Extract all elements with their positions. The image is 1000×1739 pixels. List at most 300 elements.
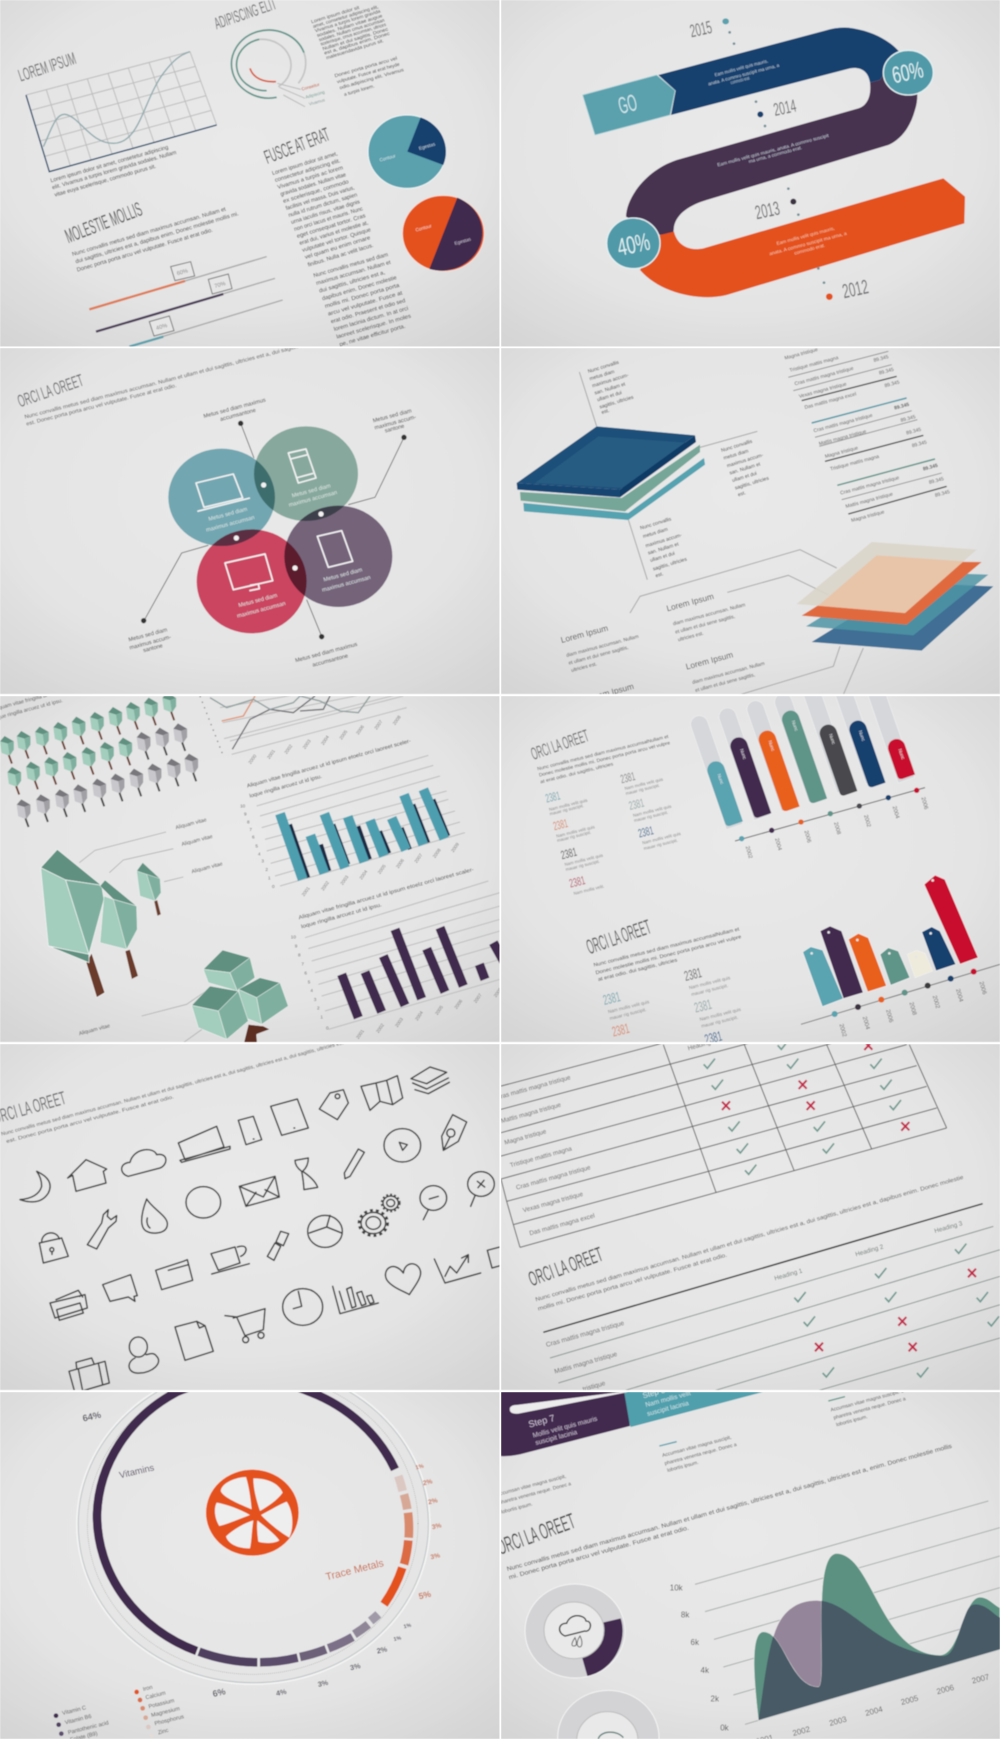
ring: vitamins main segment [97, 1379, 395, 1651]
stats 1: mauar rig suscipit. [643, 838, 678, 851]
caption: chart 2: loque ringilla arcuez ut id ipsu. [301, 902, 383, 930]
table 2 headings: Heading 1 [774, 1267, 804, 1282]
ring: vitamins minor segments [199, 1614, 378, 1662]
circle captions: maximus accumsan [236, 601, 286, 620]
icon: laptop [178, 1126, 230, 1162]
icon: pencil [344, 1149, 364, 1179]
circle captions: Metus sed diam [208, 507, 248, 523]
years: teal chart: 2007 [413, 852, 424, 864]
years: teal chart: 2004 [358, 869, 369, 881]
years: teal chart: 2005 [377, 863, 387, 875]
progress labels [156, 268, 226, 332]
percent labels: metals: 1% [415, 1464, 424, 1471]
stats 1: 2381 [544, 788, 562, 806]
icon: cup [211, 1246, 249, 1274]
stats 1: Nam mollis velit. [573, 883, 605, 896]
progress labels: 70% [214, 281, 226, 290]
go arrow: GO [616, 89, 640, 119]
panel: line icons [0, 1039, 500, 1390]
stats 2: 2381 [601, 988, 622, 1008]
stack note: right: sagittis, ultricies [734, 475, 770, 492]
table 1 row labels: Das mattis magna excel [529, 1212, 596, 1237]
timeline 1 years: 2004 [773, 838, 782, 851]
price tables: Magna tristique [824, 445, 859, 460]
timeline band: navy [658, 28, 898, 115]
price tables: Tristique mattis magna [830, 454, 880, 473]
pie chart: teal and navy: Contour [379, 153, 397, 163]
caption: chart 1: loque ringilla arcuez ut id ipsu. [249, 774, 323, 800]
text column top right: amet, consetetur adipiscing elit, [312, 4, 379, 29]
stats 1: mauar rig suscipit. [556, 830, 592, 843]
label: lorem ipsum 2: et ullam et dui sene sagittis, [675, 614, 736, 636]
stack note: bottom: san. Nullam et [647, 541, 680, 557]
area series: green [754, 1553, 1000, 1720]
icon: tag [319, 1090, 348, 1120]
text column top right: Nullam et dui sagittis. Donec [322, 26, 389, 51]
circle captions: Metus sed diam [291, 483, 332, 499]
line chart years: 2004 [320, 734, 330, 746]
y axis labels: 6k [691, 1638, 700, 1647]
tree labels: Aliquam vitae [181, 834, 213, 848]
timeline 2 years: 2002 [837, 1023, 847, 1038]
stats 2: Nam mollis velit quis [688, 975, 731, 990]
pill bars: fills [705, 708, 915, 827]
icon: zoom out [420, 1186, 447, 1220]
paragraph 1 [537, 734, 671, 784]
stats 1: Nam mollis velit quis [548, 798, 588, 812]
timeline 1 years: 2006 [802, 830, 812, 844]
intro paragraph: Nunc convallis metus sed diam maximus accumsan. Nullam et ullam et dui sagittis, ultricies est a, dui sagittis [24, 344, 300, 421]
tree labels: Aliquam vitae [175, 817, 207, 831]
note 1: Accumsan vitae magna suscipit, [662, 1435, 732, 1459]
axis numbers: purple chart: 2 [317, 1005, 320, 1010]
caption: chart 1: Aliquam vitae fringilla arcuez ut id ipsum etoelz orci laoreet sceler- [246, 738, 412, 790]
icon: phone [288, 449, 316, 483]
timeline band: orange [640, 178, 965, 297]
chart caption: vitae euya scelerisque, commodo purus sit. [54, 164, 157, 199]
small tree [137, 863, 161, 916]
percent labels: 3% [317, 1678, 330, 1689]
x axis labels: 2004 [864, 1704, 884, 1718]
years: teal chart [301, 842, 460, 897]
outer labels: accumsantone [220, 408, 257, 423]
label: lorem ipsum 3 [685, 649, 765, 694]
circle captions: maximus accumsan [288, 490, 338, 509]
stats 1: mauar rig suscipit. [625, 783, 660, 796]
table 1 row labels: Vexas magna tristique [522, 1191, 584, 1214]
progress labels: 40% [156, 323, 168, 332]
caption: chart 2 [298, 867, 475, 930]
stack note: right [720, 439, 770, 498]
stack note: top: maximus accum- [591, 372, 630, 389]
timeline 1 years: 2008 [832, 822, 841, 835]
ring labels: Conseitur [301, 82, 321, 92]
step band: purple: Mollis velit quis mauris [532, 1415, 599, 1440]
outer rings [77, 1364, 430, 1684]
price tables: Cras mattis magna tristique [813, 413, 874, 434]
icon: document [175, 1321, 213, 1360]
text column: fusce at erat: lorem lacinia dictum. In at orci [333, 306, 409, 333]
big tree 2 [100, 880, 138, 979]
pill bar labels [716, 720, 906, 786]
donut chart 1 [525, 1584, 625, 1678]
heading: ORCI LA OREET [493, 1508, 578, 1560]
table 1 row labels: Heading [687, 1039, 712, 1052]
outer labels: santone [384, 424, 405, 435]
panel: pill bars and tag bars: ORCI LA OREET [528, 725, 592, 764]
text column top right: sodales. Nullam vitae augue [316, 13, 383, 38]
line chart [200, 676, 407, 756]
text column top right: a turpis lorem. [343, 83, 375, 97]
text column: fusce at erat: Nunc convallis metus sed diam [313, 252, 389, 279]
text column: fusce at erat: arcu vel vulputate. Fusce at [327, 290, 404, 318]
text column: fusce at erat: Vivamus a turpis ac lorem [277, 165, 344, 191]
years: purple chart: 2002 [375, 1022, 385, 1034]
step band: purple: suscipit lacinia [535, 1429, 578, 1447]
stats 1: Nam mollis velit quis [642, 831, 681, 845]
outer labels: santone [143, 643, 164, 654]
icon: hourglass [295, 1158, 318, 1190]
percent labels: 2% [376, 1644, 389, 1656]
text column: fusce at erat: pe, ne vitae efficitur porta. [339, 324, 407, 348]
donut chart 2 [558, 1690, 659, 1739]
paragraph 2: at erat odio. dui sagittis, ultricies [597, 957, 679, 983]
text column: fusce at erat: vulputate vel tortor. Quisque [301, 227, 372, 254]
icon: house [68, 1160, 107, 1191]
tree labels [78, 817, 223, 1037]
stats 2 [601, 964, 742, 1047]
y axis labels [670, 1583, 730, 1732]
stack note: right: Nunc convallis [720, 439, 754, 454]
paragraph 1: Donec molestie mollis mi. Donec porta porta arcu vel vulpre [538, 740, 671, 778]
paragraph 1: Nunc convallis metus sed diam maximus accumsalNullam et [537, 734, 670, 771]
years: purple chart: 2003 [394, 1017, 404, 1028]
price tables [784, 347, 951, 524]
percent labels: 64% [82, 1410, 103, 1424]
years: purple chart: 2006 [453, 998, 464, 1010]
heading: lorem ipsum: LOREM IPSUM [16, 48, 78, 85]
pill bar labels: Nunc [739, 748, 748, 761]
years: teal chart: 2008 [432, 847, 442, 859]
stats 1: 2381 [568, 873, 587, 891]
percent labels: metals [415, 1464, 442, 1601]
text column top right: vulputate. Fusce at erat heyde [336, 61, 400, 84]
tree labels: Aliquam vitae [191, 861, 223, 875]
timeline 2 years: 2002 [931, 995, 940, 1010]
outer labels: Metus sed diam [128, 627, 168, 643]
axis numbers: purple chart: 6 [304, 970, 307, 975]
note 3: pharetra venenta neque. Donec a [498, 1481, 572, 1506]
timeline 1 years [744, 797, 929, 859]
label: lorem ipsum 4: Lorem Ipsum [585, 681, 635, 703]
icon: rain cloud [560, 1616, 590, 1647]
axis numbers: teal chart [240, 803, 275, 889]
years: purple chart: 2004 [414, 1010, 424, 1022]
price tables: 89.345 [873, 354, 890, 364]
label: lorem ipsum 3: Lorem Ipsum [685, 649, 734, 672]
label: lorem ipsum 1: ultricies est. [571, 661, 598, 674]
icon: trend chart [434, 1255, 481, 1283]
pie chart: teal and navy: Egestas [418, 141, 436, 151]
stats 1: Nam mollis velit quis [556, 824, 595, 839]
chart caption: elit. Vivamus a turpis lorem gravida sodales. Nullam [52, 150, 177, 191]
percent labels [82, 1410, 412, 1699]
axis numbers: purple chart: 9 [295, 944, 298, 949]
badge: 60% [883, 50, 933, 95]
circle captions: maximus accumsan [205, 515, 255, 534]
table 2 headings [774, 1220, 964, 1282]
bar chart: purple [342, 928, 510, 1018]
legend: vitamins: Vitamin B6 [64, 1714, 92, 1726]
legend: metals [134, 1685, 185, 1738]
outer labels: Metus sed diam maximus [203, 397, 267, 420]
axis numbers: teal chart: 10 [240, 803, 246, 808]
line chart years: 2001 [266, 748, 276, 760]
text column: fusce at erat: laoreet scelerisque. In moles [336, 313, 412, 341]
stats 1: Nam mollis velit quis [624, 777, 664, 791]
axis numbers: teal chart: 7 [249, 827, 252, 832]
tag holes [810, 879, 934, 958]
icon: chain [267, 1231, 289, 1260]
paragraph: molestie mollis: Nunc convallis metus sed diam maximus accumsan. Nullam et [72, 207, 227, 258]
stack note: top: metus diam [589, 369, 615, 382]
cube tree [192, 950, 288, 1044]
price tables: Das mattis magna excel [804, 391, 857, 411]
pill bar labels: Nunc [791, 720, 799, 732]
pie chart: orange and purple [402, 195, 484, 271]
axis numbers: purple chart: 7 [301, 961, 304, 966]
panel: charts and text: FUSCE AT ERAT [262, 125, 333, 169]
text column: fusce at erat: non orci lacus et mauris. Nunc [293, 206, 364, 233]
icon: partial box [487, 1247, 500, 1268]
legend: metals: Potassium [148, 1698, 175, 1710]
price tables: Vexas magna tristique [798, 381, 848, 400]
step band: purple [500, 1391, 630, 1456]
legend: metals: Zinc [157, 1728, 169, 1736]
percent labels: metals: 3% [430, 1552, 441, 1561]
percent labels: 4% [275, 1687, 288, 1698]
stats 2: 2381 [703, 1027, 724, 1047]
stack note: right: san. Nullam et [729, 461, 762, 477]
icon: bar chart [333, 1286, 378, 1314]
timeline 1 years: 2002 [862, 814, 871, 828]
stack note: top: san. Nullam et [594, 381, 627, 397]
stats 2: mauar rig suscipit. [701, 1015, 739, 1029]
paragraph 2 [593, 926, 742, 983]
paragraph 2: Donec molestie mollis mi. Donec porta porta arcu vel vulpre [595, 934, 742, 976]
stats 1: 2381 [627, 796, 646, 813]
table 2 row labels: tristique [582, 1380, 607, 1393]
price tables: Mattis magna tristique [845, 491, 894, 510]
pill bar labels: Nunc [828, 733, 837, 746]
icon: folder [156, 1260, 193, 1290]
layer stack: translucent [797, 542, 993, 651]
text column top right: scelerisque, cmus accumsan, ultrices [320, 22, 387, 47]
panel: S-shaped timeline [501, 0, 1000, 346]
note 1: lobortis ipsum. [667, 1460, 699, 1474]
percent labels: metals: 3% [431, 1522, 442, 1531]
stats 1: 2381 [559, 845, 578, 862]
label: lorem ipsum 1: diam maximus accumsan. Nullam [566, 634, 639, 659]
x axis labels: 2006 [936, 1683, 956, 1696]
legend: vitamins: Pantothenic acid [67, 1720, 109, 1736]
axis numbers: purple chart [291, 935, 329, 1030]
stack note: top: est. [601, 408, 610, 416]
timeline 2 years: 2006 [977, 981, 987, 996]
text column top right: malesuendavida purus sit. [325, 38, 384, 60]
line chart years: 2002 [283, 743, 294, 755]
intro paragraph: est. Donec porta porta arcu vel vulputate. Fusce at erat odio. [26, 383, 177, 428]
stats 1: mauar rig suscipit. [633, 810, 669, 823]
paragraph 1: at erat odio. dui sagittis, ultricies [540, 761, 614, 784]
axis numbers: teal chart: 4 [258, 851, 261, 856]
price tables: Cras mattis magna tristique [840, 475, 900, 497]
note 3: Accumsan vitae magna suscipit, [496, 1474, 567, 1498]
table 1 row labels: Magna tristique [504, 1128, 548, 1147]
label: lorem ipsum 2: diam maximus accumsan. Nullam [672, 602, 746, 627]
ring: trace metals segments [384, 1476, 409, 1604]
go arrow [583, 75, 675, 135]
area series: mauve [758, 1600, 1000, 1720]
label: lorem ipsum 3: et ullam et dui sene sagittis, [695, 672, 756, 694]
years: teal chart: 2001 [301, 886, 311, 897]
icon: layers [411, 1067, 449, 1094]
panel: trees and bar charts [0, 682, 503, 1042]
icon: tablet [271, 1099, 308, 1135]
timeline 1 years: 2006 [919, 797, 929, 810]
years: teal chart: 2006 [395, 858, 405, 869]
panel: pill bars and tag bars: ORCI LA OREET [583, 916, 654, 959]
bar chart: teal and navy [280, 789, 448, 879]
x axis labels: 2003 [828, 1714, 848, 1728]
stats 2: mauar rig suscipit. [691, 983, 729, 997]
text column: fusce at erat: finibus. Nulla ac velit lacus. [307, 243, 375, 269]
bar chart grid: teal [257, 755, 465, 886]
circle captions: Metus sed diam [238, 593, 278, 609]
year: 2015: 2015 [688, 17, 714, 41]
panel: pill bars and tag bars [501, 696, 1000, 1047]
price tables: 89.345 [894, 402, 910, 412]
step band: teal [620, 1385, 767, 1427]
label: lorem ipsum 2: Lorem Ipsum [665, 591, 715, 613]
big tree 1 [41, 849, 105, 998]
x axis labels: 2005 [900, 1693, 920, 1707]
ring labels: Vivamus [308, 97, 325, 107]
area overlap [758, 1600, 1000, 1720]
line chart years: 2006 [355, 724, 365, 736]
text column top right: Lorem ipsum dolor sit [310, 5, 361, 24]
years: purple chart: 2007 [473, 992, 483, 1004]
text column top right: Vivamus a turpis lorem gravida [314, 8, 381, 33]
badge: 40%: 40% [615, 229, 653, 262]
line chart [26, 52, 217, 172]
icon: pen nib [442, 1115, 467, 1150]
layer stack: dark [517, 426, 705, 520]
stats 1 [544, 769, 681, 896]
badge: 40% [607, 218, 660, 269]
label: lorem ipsum 2: ultricies est. [677, 631, 704, 643]
stats 2: Nam mollis velit quis [607, 999, 650, 1014]
price tables: Mattis magna tristique [818, 429, 867, 447]
price tables: 89.345 [900, 414, 917, 424]
progress labels: 60% [176, 268, 189, 277]
tag bars [803, 875, 978, 1007]
stack note: right: maximus accum- [726, 452, 764, 469]
paragraph: mollis mi. Donec porta porta arcu vel vulputate. Fusce at erat odio. [537, 1252, 728, 1313]
paragraph: molestie mollis: dui sagittis, ultricies est a, dapibus enim. Donec molestie mollis mi. [75, 211, 240, 265]
outer labels [128, 397, 417, 669]
axis numbers: purple chart: 5 [308, 979, 311, 984]
icon: tablet [317, 531, 353, 567]
stats 2: 2381 [683, 964, 703, 984]
years: purple chart: 2001 [355, 1028, 365, 1040]
icon: play [384, 1129, 421, 1162]
timeline 2 years [837, 981, 987, 1038]
text column top right [310, 4, 405, 97]
circle captions: Metus sed diam [323, 567, 363, 583]
percent labels: 1% [403, 1623, 412, 1630]
axis numbers: teal chart: 9 [244, 811, 247, 816]
text column top right: sodales. Nullam cmus accumsan [318, 17, 385, 42]
pictogram tree grid [0, 693, 198, 827]
percent labels: metals: 2% [422, 1478, 433, 1487]
text column: fusce at erat: gravida sodales. Nullam vitae [280, 172, 347, 198]
outer labels: maximus accum- [129, 635, 172, 651]
text column: fusce at erat: vel quam eu enim ornare [304, 235, 371, 261]
stack note: top: ullam et dui [596, 390, 623, 403]
step band: teal: suscipit lacinia [646, 1400, 690, 1418]
timeline band: purple [626, 51, 917, 235]
pill bar labels: Nunc [858, 730, 866, 742]
stack note: bottom: maximus accum- [645, 532, 683, 549]
timeline 2 years: 2004 [861, 1016, 870, 1031]
y axis labels: 0k [720, 1723, 730, 1732]
timeline 1 years: 2002 [744, 846, 753, 859]
table 1 marks [704, 1040, 909, 1174]
chart caption: Lorem ipsum dolor sit amet, consetetur adipiscing [50, 145, 169, 184]
outer labels: maximus accum- [374, 415, 417, 431]
text column top right: Donec porta porta arcu vel [334, 56, 398, 78]
table 2 headings: Heading 3 [934, 1220, 964, 1235]
text column: fusce at erat: facilisis vel massa. Duis varius, [285, 185, 356, 212]
icon: envelope [239, 1176, 279, 1206]
panel: charts and text [0, 0, 500, 348]
line chart years: 2005 [338, 729, 349, 741]
price tables: 89.345 [922, 463, 939, 473]
stats 1: 2381 [619, 769, 637, 786]
heading: ORCI LA OREET [526, 1243, 606, 1291]
percent labels: 1% [393, 1635, 402, 1643]
percent labels: 3% [349, 1661, 362, 1672]
line chart years [247, 714, 402, 765]
axis numbers: teal chart: 2 [265, 867, 268, 872]
icon: circle [186, 1187, 221, 1218]
text column: fusce at erat: erat dui, varius et molestie at, [299, 220, 370, 247]
axis numbers: purple chart: 8 [298, 953, 301, 958]
table 2 row labels [545, 1320, 625, 1393]
price tables: 89.345 [884, 379, 901, 389]
legend: metals: Magnesium [151, 1706, 181, 1719]
text column: fusce at erat: mollis mi. Donec porta porta [324, 283, 401, 310]
y axis labels: 10k [670, 1583, 684, 1592]
price tables: 89.345 [928, 476, 945, 486]
pill bar labels: Nunc [716, 773, 725, 786]
stats 1: Nam mollis velit quis [564, 853, 604, 867]
note 3 [496, 1474, 572, 1516]
stats 2: mauar rig suscipit. [609, 1007, 647, 1021]
label: lorem ipsum 3: diam maximus accumsan. Nullam [692, 661, 765, 686]
label: lorem ipsum 1 [560, 623, 639, 674]
